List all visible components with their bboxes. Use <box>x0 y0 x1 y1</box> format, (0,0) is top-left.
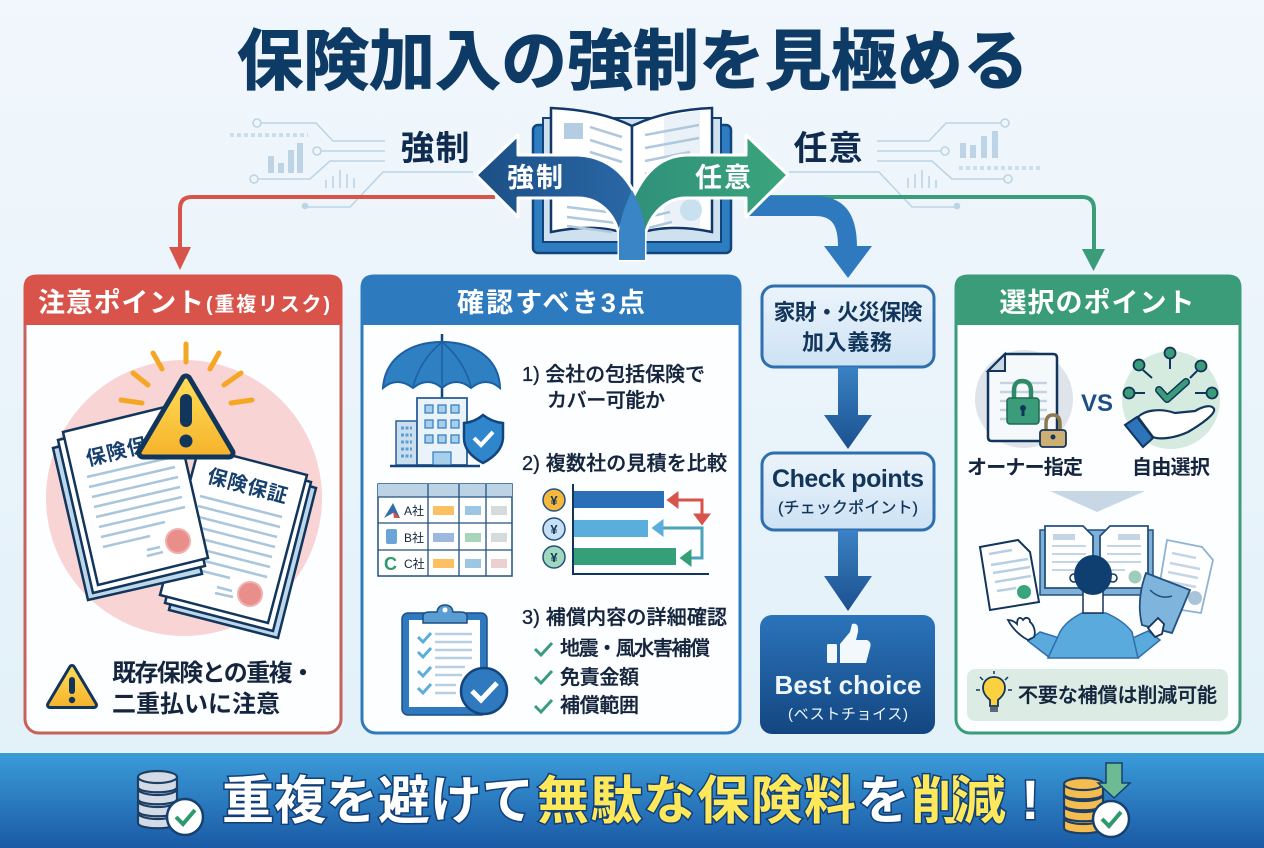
flow box: Check points: (チェックポイント) <box>778 499 918 517</box>
document: far left <box>980 540 1039 610</box>
checklist: coverage details: 免責金額 <box>560 666 639 689</box>
banner text: 削減 <box>911 773 1006 831</box>
document: left certificate <box>53 405 208 600</box>
icon: yen coins: ¥ <box>550 493 558 508</box>
flow box: Best choice: Best choice <box>774 670 922 700</box>
icon: light bulb <box>976 671 1012 712</box>
person <box>1008 555 1190 658</box>
icon: clipboard with check <box>402 605 507 715</box>
panel header: caution: (重複リスク) <box>206 293 330 316</box>
flow box: Check points <box>762 453 934 530</box>
text: point 1: カバー可能か <box>547 389 665 412</box>
checklist: coverage details: 地震・風水害補償 <box>560 637 710 660</box>
label: free choice: 自由選択 <box>1132 456 1210 479</box>
panel header: caution: 注意ポイント <box>38 288 204 318</box>
circuit decoration: left <box>230 119 473 208</box>
flow box: Best choice: (ベストチョイス) <box>788 706 908 723</box>
icon: free-choice hand with nodes <box>1122 348 1220 449</box>
text: point 2: 2) 複数社の見積を比較 <box>522 452 727 475</box>
flow box: Best choice <box>760 615 935 734</box>
label: 強制: 強制 <box>400 130 470 168</box>
table: company comparison: C <box>384 554 397 574</box>
panel: three points to check <box>360 274 742 733</box>
banner text: を <box>858 773 910 831</box>
callout: unnecessary coverage can be cut <box>967 669 1228 721</box>
circuit decoration: right <box>789 119 1040 208</box>
label: 任意: 任意 <box>794 130 862 168</box>
banner text <box>222 768 1040 831</box>
icon: open book <box>533 108 731 253</box>
banner <box>0 753 1264 848</box>
icon: silver coin stack with check <box>138 771 203 835</box>
label: owner designated: オーナー指定 <box>967 456 1083 479</box>
flow box: Check points: Check points <box>772 465 924 493</box>
icon: small warning triangle <box>50 668 94 705</box>
illustration: duplicated insurance documents <box>46 344 322 638</box>
panel: caution <box>24 274 342 733</box>
flow box: 家財・火災保険 加入義務: 家財・火災保険 <box>774 300 922 325</box>
flow box: 家財・火災保険 加入義務 <box>762 286 934 367</box>
arrow: right 任意 <box>619 135 788 260</box>
document: left certificate: 保険保 <box>84 434 149 471</box>
table: company comparison: A社 <box>404 503 424 518</box>
document: far right <box>1156 540 1213 613</box>
flow box: 家財・火災保険 加入義務: 加入義務 <box>802 330 892 355</box>
table: company comparison: C社 <box>404 556 425 571</box>
banner text: 重複を避けて <box>222 773 534 831</box>
arrow stem <box>619 190 645 260</box>
document: right certificate <box>160 447 316 638</box>
panel: selection points <box>954 274 1242 733</box>
text: point 1 <box>522 363 705 412</box>
icon: thumbs up <box>827 624 871 663</box>
icon: warning rays <box>121 344 252 403</box>
table: company comparison: B社 <box>404 530 424 545</box>
panel header: caution <box>24 274 342 325</box>
banner text: 無駄な保険料 <box>537 773 856 831</box>
arrow: red comparison <box>669 494 708 523</box>
checklist: coverage details: 補償範囲 <box>560 694 639 717</box>
caution text <box>112 660 315 718</box>
document: right certificate: 保険保証 <box>205 465 290 508</box>
banner text: ! <box>1021 768 1040 831</box>
arrow: teal comparison <box>654 522 702 564</box>
title: 保険加入の強制を見極める <box>237 24 1029 98</box>
icon: large warning triangle <box>143 380 229 453</box>
chart: premium comparison bars <box>543 484 709 574</box>
connector: red line to caution panel <box>169 197 495 270</box>
caution text: 二重払いに注意 <box>112 691 280 718</box>
caution text: 既存保険との重複・ <box>112 660 315 687</box>
icon: owner-designated document with locks <box>975 350 1073 448</box>
panel header: selection <box>954 274 1242 325</box>
panel header: three points: 確認すべき3点 <box>457 288 645 318</box>
table: company comparison <box>378 484 512 576</box>
text: point 3: 3) 補償内容の詳細確認 <box>522 606 727 629</box>
label: VS: VS <box>1081 390 1113 417</box>
arrow: left 強制: 強制 <box>507 163 563 193</box>
illustration: person comparing documents <box>980 526 1213 658</box>
open binder pages <box>1040 526 1153 595</box>
arrow: down triangle <box>1050 491 1145 512</box>
arrow: flow 2 to 3 <box>824 530 872 611</box>
arrow: left 強制 <box>476 135 645 260</box>
checklist: coverage details <box>535 637 710 717</box>
arrow: right 任意: 任意 <box>695 163 751 193</box>
connector: green line to selection panel <box>770 197 1105 271</box>
icon: yen coins: ¥ <box>550 550 558 565</box>
callout: unnecessary coverage can be cut: 不要な補償は削減可能 <box>1018 684 1217 707</box>
arrow: flow 1 to 2 <box>824 367 872 449</box>
icon: gold coin stack with down arrow and check <box>1064 763 1130 837</box>
panel header: selection: 選択のポイント <box>1000 288 1194 318</box>
icon: yen coins: ¥ <box>550 522 558 537</box>
panel header: three points <box>360 274 742 325</box>
icon: umbrella over building with shield <box>383 334 503 466</box>
icon: yen coins <box>543 489 565 568</box>
arrow: blue route down to flow column <box>745 196 872 278</box>
text: point 1: 1) 会社の包括保険で <box>522 363 705 386</box>
